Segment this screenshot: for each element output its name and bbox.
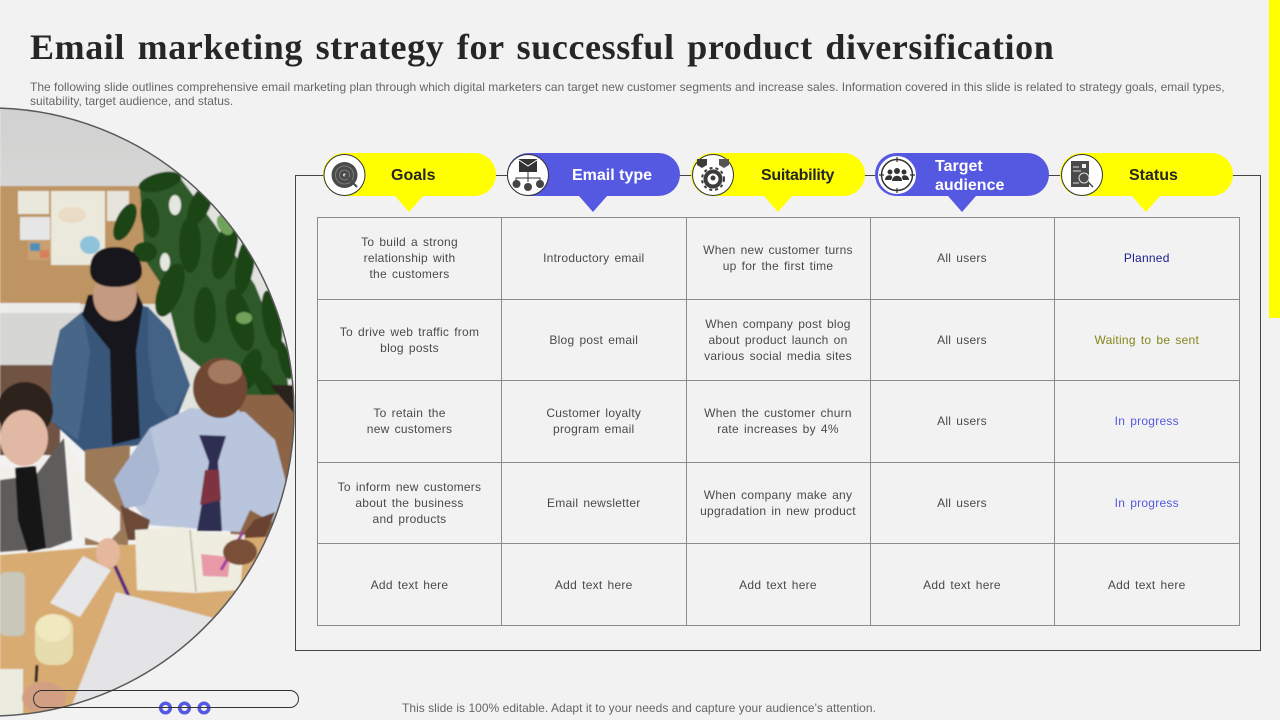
strategy table: Add text here bbox=[923, 578, 1001, 592]
strategy table: up for the first time bbox=[723, 259, 833, 273]
small notebook and hand bbox=[0, 669, 23, 719]
header: Target audience: Target bbox=[935, 158, 983, 175]
strategy table: Customer loyalty bbox=[546, 406, 641, 420]
strategy table: various social media sites bbox=[704, 349, 852, 363]
strategy table: program email bbox=[553, 422, 634, 436]
table bbox=[0, 536, 266, 714]
header: Target audience bbox=[875, 153, 1049, 212]
glass bbox=[0, 572, 25, 636]
denim man bbox=[50, 300, 190, 452]
strategy table: Planned bbox=[1124, 251, 1170, 265]
header: Suitability bbox=[691, 153, 865, 212]
strategy table: rate increases by 4% bbox=[717, 422, 839, 436]
wood chair and floor bbox=[85, 445, 130, 545]
strategy table: When company post blog bbox=[705, 317, 851, 331]
header: Goals: Goals bbox=[391, 167, 435, 184]
strategy table: Email newsletter bbox=[547, 496, 641, 510]
header: Goals bbox=[323, 153, 496, 212]
strategy table: When the customer churn bbox=[704, 406, 852, 420]
strategy table: In progress bbox=[1115, 414, 1179, 428]
strategy table: Add text here bbox=[739, 578, 817, 592]
header: Suitability: Suitability bbox=[761, 167, 834, 184]
strategy table: To drive web traffic from bbox=[340, 325, 479, 339]
strategy table: blog posts bbox=[380, 341, 439, 355]
plant bbox=[140, 175, 290, 400]
strategy table: Add text here bbox=[555, 578, 633, 592]
strategy table: To retain the bbox=[373, 406, 446, 420]
footer note: This slide is 100% editable. Adapt it to your needs and capture your audience's attention. bbox=[402, 701, 876, 715]
strategy table: When company make any bbox=[704, 488, 852, 502]
strategy table: about product launch on bbox=[708, 333, 848, 347]
strategy table: Add text here bbox=[1108, 578, 1186, 592]
outer frame bbox=[295, 175, 1261, 651]
strategy table: All users bbox=[937, 251, 987, 265]
strategy table: and products bbox=[373, 512, 446, 526]
header: Email type: Email type bbox=[572, 167, 652, 184]
strategy table: Blog post email bbox=[549, 333, 638, 347]
strategy table: relationship with bbox=[364, 251, 455, 265]
strategy table: All users bbox=[937, 333, 987, 347]
seated man bbox=[135, 408, 286, 533]
strategy table: Add text here bbox=[371, 578, 448, 592]
strategy table: All users bbox=[937, 496, 987, 510]
notebook bbox=[135, 527, 245, 593]
header: Target audience: audience bbox=[935, 177, 1004, 194]
intro text: The following slide outlines comprehensive email marketing plan through which digital marketers can target new customer segments and increase sales. Information covered in this slide is related to strategy goals, email types, suitability, target audience, and status. bbox=[30, 80, 1225, 108]
strategy table: To build a strong bbox=[361, 235, 458, 249]
cup bbox=[35, 615, 73, 665]
strategy table: When new customer turns bbox=[703, 243, 853, 257]
strategy table: Waiting to be sent bbox=[1094, 333, 1199, 347]
strategy table: upgradation in new product bbox=[700, 504, 856, 518]
header: Status bbox=[1060, 153, 1233, 212]
strategy table: To inform new customers bbox=[338, 480, 481, 494]
title: Email marketing strategy for successful product diversification bbox=[30, 27, 1054, 67]
woman bbox=[0, 382, 54, 428]
header: Email type bbox=[507, 153, 680, 212]
accent bar: yellow bbox=[1269, 0, 1280, 318]
paper bbox=[70, 592, 214, 710]
strategy table: Introductory email bbox=[543, 251, 644, 265]
strategy table: about the business bbox=[355, 496, 464, 510]
receipt pad bbox=[50, 556, 111, 617]
strategy table: new customers bbox=[367, 422, 452, 436]
header: Status: Status bbox=[1129, 167, 1178, 184]
strategy table: All users bbox=[937, 414, 987, 428]
decorative caption pill with dots bbox=[33, 690, 299, 714]
strategy table: the customers bbox=[369, 267, 450, 281]
strategy table: In progress bbox=[1115, 496, 1179, 510]
strategy table bbox=[317, 217, 1240, 626]
photo: team meeting in circular crop bbox=[0, 107, 295, 717]
